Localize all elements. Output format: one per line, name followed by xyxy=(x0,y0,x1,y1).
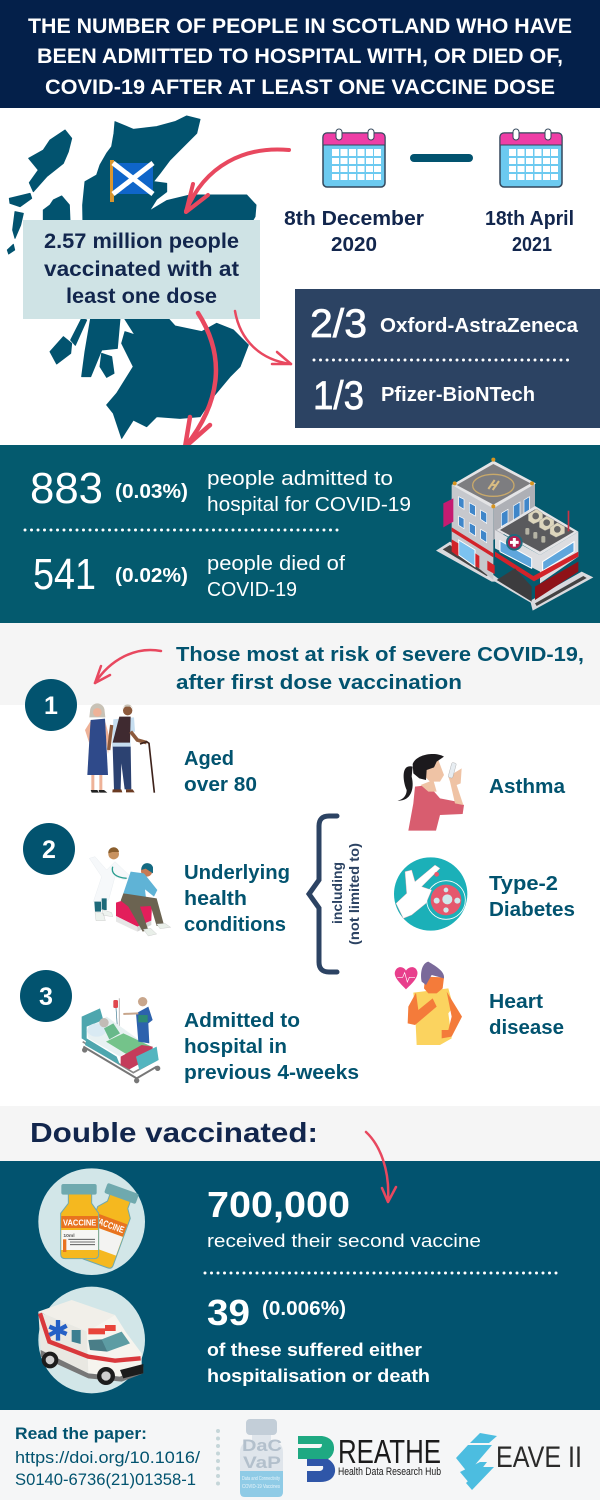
label: admitted to hospital: Admitted to xyxy=(184,1010,300,1032)
heading: double vaccinated: Double vaccinated: xyxy=(30,1117,318,1148)
marker: number 2: 2 xyxy=(42,836,56,864)
title banner: BEEN ADMITTED TO HOSPITAL WITH, OR DIED OF, xyxy=(37,45,563,68)
logo: BREATHE xyxy=(298,1433,441,1482)
end date label: 18th April xyxy=(485,208,574,230)
stat: 700,000 second dose: received their second vaccine xyxy=(207,1231,481,1251)
stat: 541 deaths: (0.02%) xyxy=(115,565,188,587)
label: aged over 80 xyxy=(184,748,257,796)
title banner: THE NUMBER OF PEOPLE IN SCOTLAND WHO HAVE xyxy=(28,15,572,38)
text: read the paper xyxy=(15,1424,200,1489)
label: underlying health conditions xyxy=(184,862,290,936)
logo: EAVE II: EAVE II xyxy=(496,1441,582,1474)
panel: vaccine split: 2/3 xyxy=(310,302,367,346)
stat: 883 hospital admissions: 883 xyxy=(30,464,103,513)
label: asthma: Asthma xyxy=(489,776,566,798)
logo: EAVE II xyxy=(456,1433,582,1490)
stat: 39 hospitalised or died: hospitalisation or death xyxy=(207,1366,430,1386)
icon: vaccine vials: VACCINE xyxy=(63,1217,97,1227)
end date label xyxy=(485,208,574,256)
brace: including conditions xyxy=(309,816,362,972)
callout: people vaccinated: vaccinated with at xyxy=(44,258,239,281)
stat: 39 hospitalised or died xyxy=(207,1292,430,1386)
panel: severe risk heading: Those most at risk of severe COVID-19, xyxy=(176,644,584,666)
icon: Scottish flag xyxy=(110,160,153,202)
stat: 39 hospitalised or died: of these suffered either xyxy=(207,1340,422,1360)
illustration: doctor and patient xyxy=(89,847,171,936)
logo: DaC VaP: VaP xyxy=(243,1453,281,1472)
stat: 883 hospital admissions: people admitted to xyxy=(207,468,393,490)
icon: hospital building xyxy=(436,458,593,611)
marker: number 3: 3 xyxy=(39,983,53,1011)
icon: ambulance xyxy=(38,1287,145,1393)
illustration: patient in hospital bed xyxy=(82,997,160,1083)
date range connector xyxy=(410,154,473,162)
stat: 541 deaths: COVID-19 xyxy=(207,579,297,601)
label: type-2 diabetes: Type-2 xyxy=(489,873,558,895)
arrow: heading to risk list xyxy=(95,650,161,683)
panel: double vaccinated outcomes xyxy=(0,1161,600,1410)
illustration: elderly couple xyxy=(85,703,154,793)
stat: 700,000 second dose xyxy=(207,1184,481,1251)
text: read the paper: S0140-6736(21)01358-1 xyxy=(15,1470,196,1489)
brace: including conditions: including xyxy=(329,862,345,924)
label: underlying health conditions: health xyxy=(184,888,247,910)
label: aged over 80: Aged xyxy=(184,748,234,770)
logo: BREATHE: REATHE xyxy=(338,1433,441,1470)
title banner: COVID-19 AFTER AT LEAST ONE VACCINE DOSE xyxy=(45,76,555,99)
marker: number 1 xyxy=(25,679,77,731)
title banner xyxy=(0,0,600,108)
callout: people vaccinated: least one dose xyxy=(66,285,217,308)
stat: 883 hospital admissions: (0.03%) xyxy=(115,481,188,503)
brace: including conditions: (not limited to) xyxy=(346,843,362,945)
arrow: callout to hospital panel xyxy=(185,313,216,447)
map of Scotland xyxy=(7,116,256,438)
icon: vaccine vials: 10ml xyxy=(63,1233,75,1239)
callout: people vaccinated: 2.57 million people xyxy=(44,230,239,253)
logo: DaC VaP: DaC xyxy=(242,1436,282,1455)
label: aged over 80: over 80 xyxy=(184,774,257,796)
label: heart disease: Heart xyxy=(489,991,543,1013)
marker: number 2 xyxy=(23,823,75,875)
label: heart disease: disease xyxy=(489,1017,564,1039)
icon: end date calendar xyxy=(500,129,562,187)
panel: vaccine split: 1/3 xyxy=(313,374,364,418)
stat: 883 hospital admissions xyxy=(30,464,411,516)
stat: 541 deaths xyxy=(33,550,345,601)
panel: severe risk heading xyxy=(0,623,600,705)
panel: severe risk heading: after first dose vaccination xyxy=(176,672,462,694)
text: read the paper: https://doi.org/10.1016/ xyxy=(15,1448,200,1467)
illustration: woman with heart condition xyxy=(395,962,462,1045)
text: read the paper: Read the paper: xyxy=(15,1424,147,1443)
logo: DaC VaP xyxy=(240,1419,283,1497)
stat: 39 hospitalised or died: (0.006%) xyxy=(262,1298,346,1320)
footer xyxy=(0,1410,600,1500)
icon: vaccine vials: VACCINE xyxy=(93,1215,125,1235)
label: underlying health conditions: Underlying xyxy=(184,862,290,884)
logo: DaC VaP: Data and Connectivity xyxy=(242,1476,280,1482)
arrow: double vaccinated to panel xyxy=(366,1132,396,1202)
start date label: 8th December xyxy=(284,208,424,230)
label: type-2 diabetes: Diabetes xyxy=(489,899,575,921)
logo: DaC VaP: COVID-19 Vaccines xyxy=(242,1484,280,1490)
arrow: callout to vaccine split xyxy=(235,311,291,364)
panel: vaccine split: Pfizer-BioNTech xyxy=(381,384,535,406)
callout: people vaccinated xyxy=(23,220,260,319)
panel: vaccine split: Oxford-AstraZeneca xyxy=(380,315,579,337)
icon: start date calendar xyxy=(323,129,385,187)
label: underlying health conditions: conditions xyxy=(184,914,286,936)
marker: number 3 xyxy=(20,970,72,1022)
illustration: diabetes finger prick xyxy=(394,857,467,931)
label: admitted to hospital: previous 4-weeks xyxy=(184,1062,359,1084)
label: admitted to hospital xyxy=(184,1010,359,1084)
marker: number 1: 1 xyxy=(44,692,58,720)
icon: vaccine vials xyxy=(38,1168,145,1275)
stat: 541 deaths: 541 xyxy=(33,550,96,599)
label: heart disease xyxy=(489,991,564,1039)
arrow: dates to callout xyxy=(186,149,289,212)
heading: double vaccinated xyxy=(0,1106,600,1161)
panel: outcomes after first dose xyxy=(0,445,600,623)
illustration: woman with inhaler xyxy=(397,754,464,831)
stat: 39 hospitalised or died: 39 xyxy=(207,1292,250,1333)
stat: 541 deaths: people died of xyxy=(207,553,345,575)
panel: vaccine split xyxy=(295,289,600,428)
stat: 883 hospital admissions: hospital for COVID-19 xyxy=(207,494,411,516)
end date label: 2021 xyxy=(512,234,552,256)
stat: 700,000 second dose: 700,000 xyxy=(207,1184,350,1225)
label: type-2 diabetes xyxy=(489,873,575,921)
start date label: 2020 xyxy=(331,234,377,256)
logo: BREATHE: Health Data Research Hub xyxy=(338,1466,441,1478)
label: admitted to hospital: hospital in xyxy=(184,1036,287,1058)
start date label xyxy=(284,208,424,256)
